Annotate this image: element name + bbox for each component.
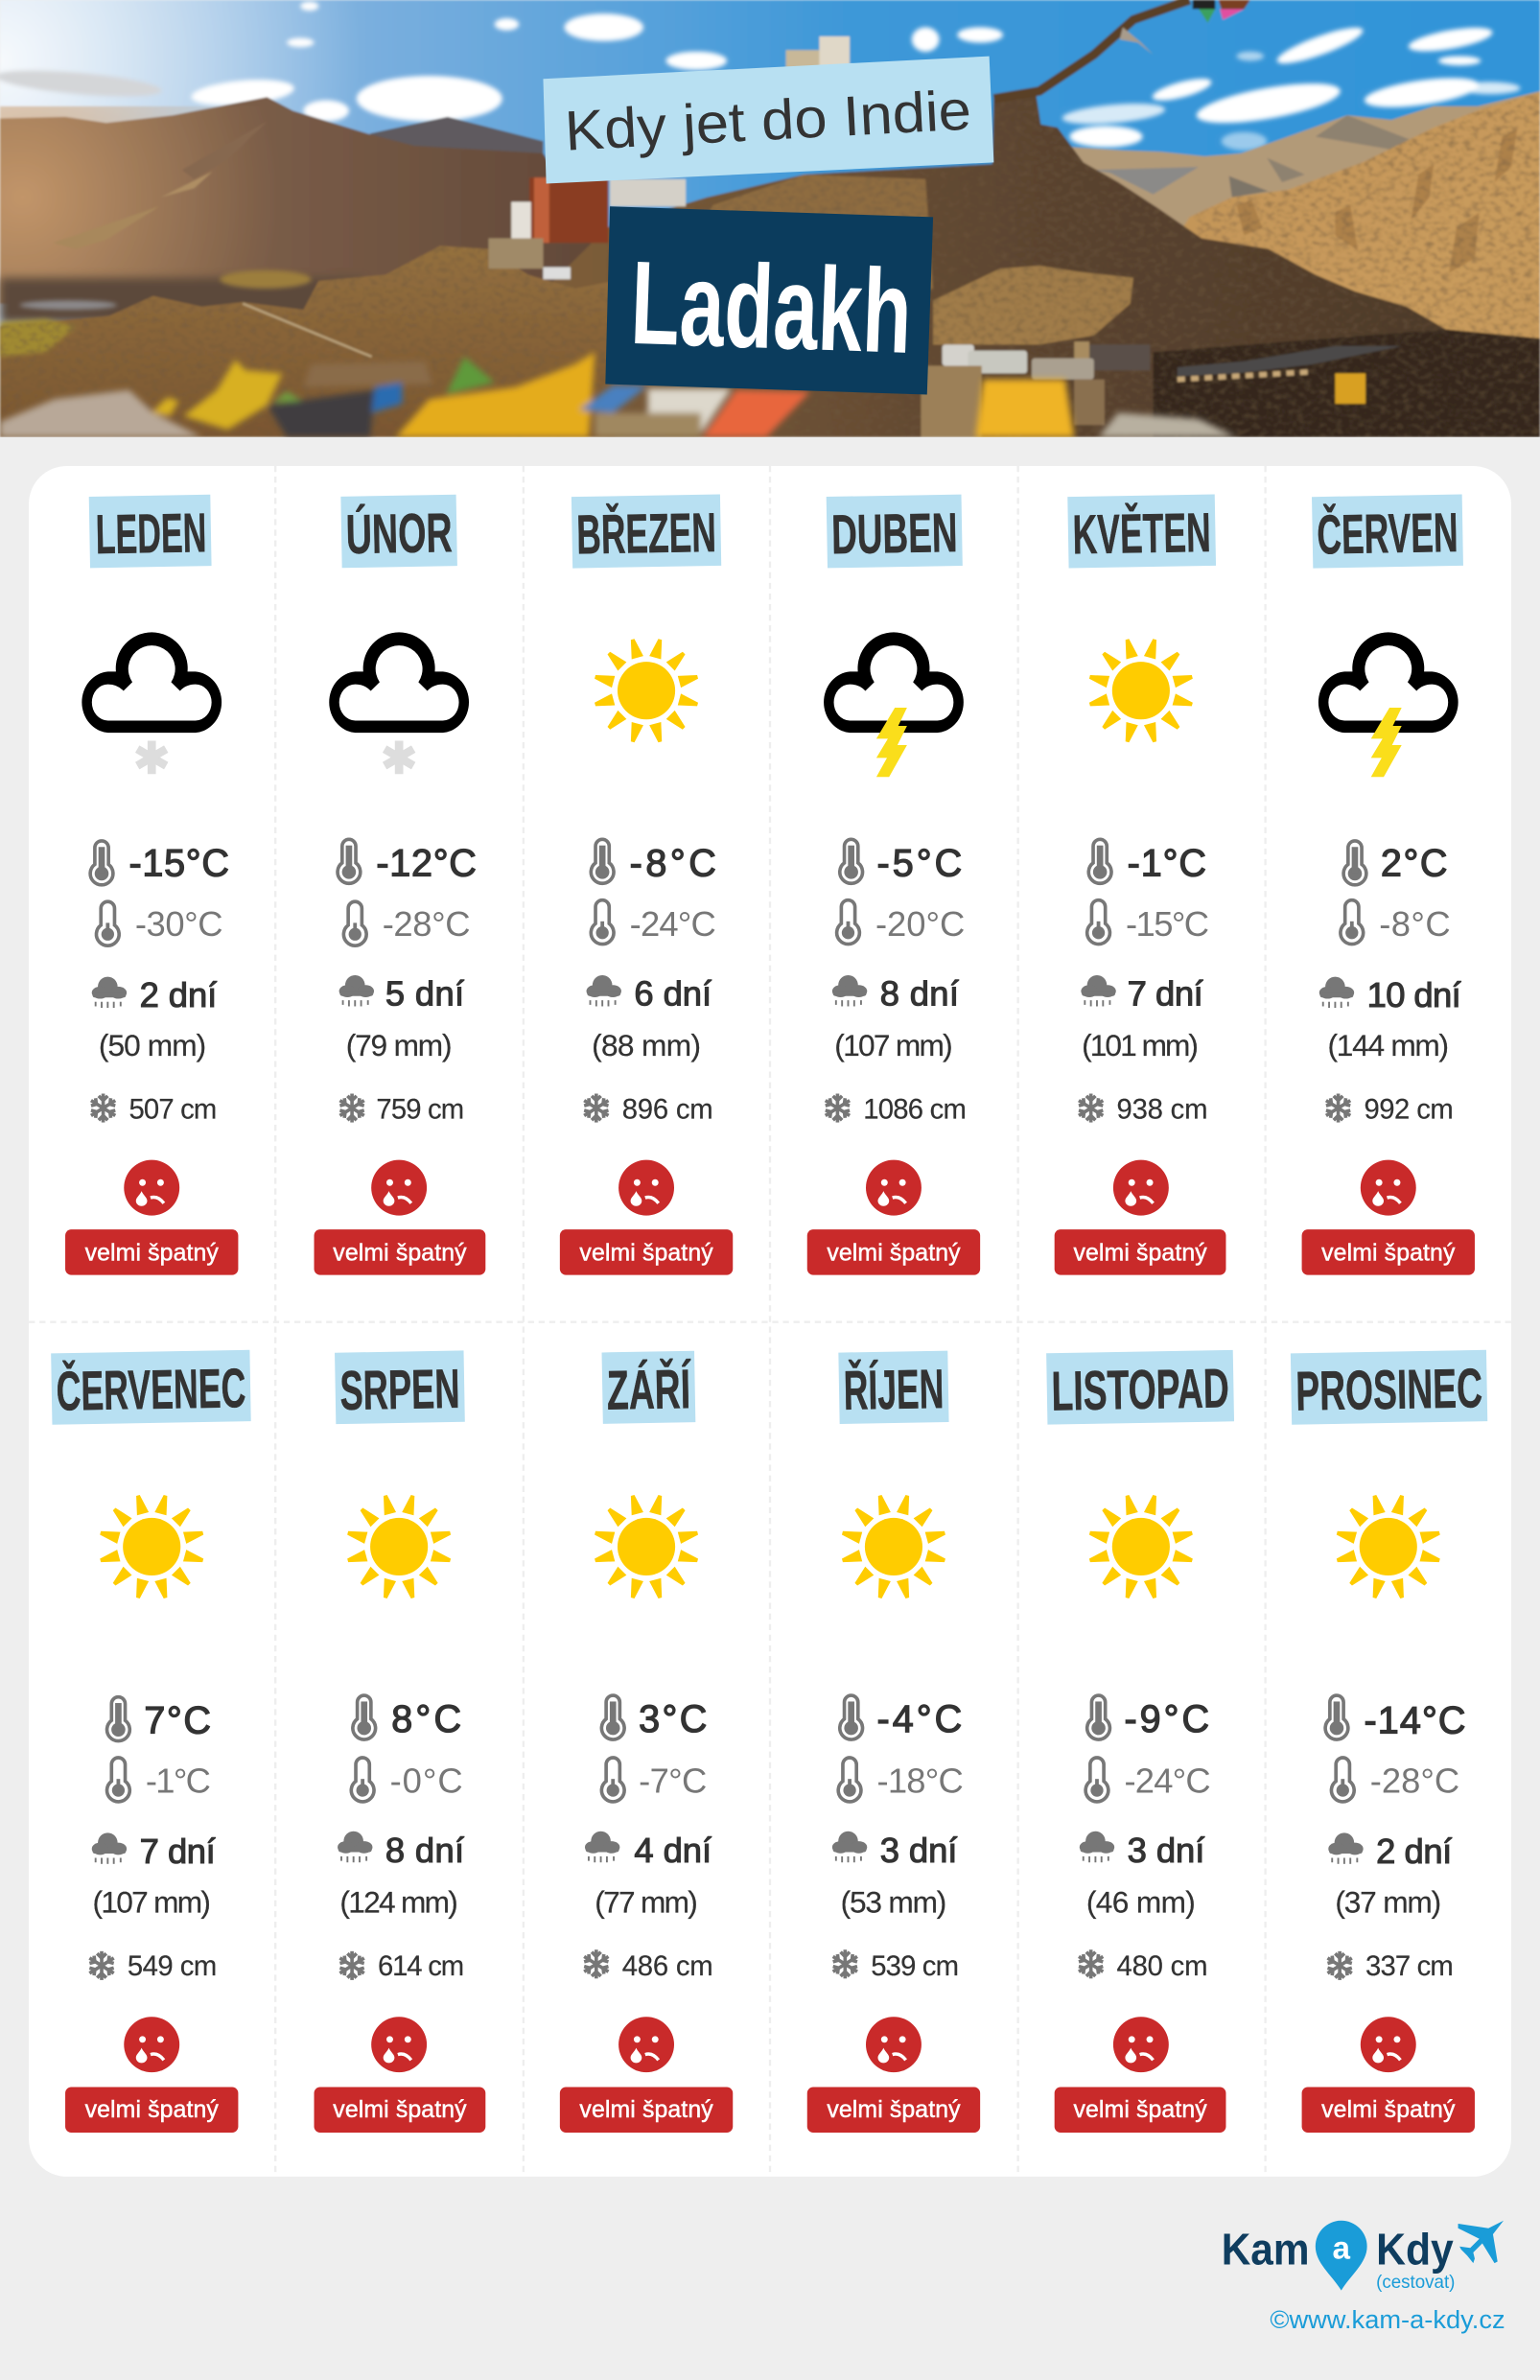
far tan ridge xyxy=(1070,90,1540,227)
icon: sun xyxy=(594,1494,699,1599)
low temperature xyxy=(343,901,471,945)
column: srpen xyxy=(315,1350,485,2133)
icon: map pin: a xyxy=(1332,2230,1350,2266)
icon: airplane xyxy=(1458,2221,1504,2263)
low temperature: -30°C xyxy=(135,904,223,944)
low temperature: -20°C xyxy=(875,904,965,944)
high temperature: -4°C xyxy=(877,1698,962,1740)
icon: sad face xyxy=(371,2017,427,2072)
rainy days: 3 dní xyxy=(880,1831,957,1870)
rainy days: 4 dní xyxy=(634,1831,712,1870)
column: cervenec xyxy=(51,1350,251,2133)
left mountain xyxy=(0,97,607,304)
icon: sun xyxy=(594,638,699,743)
rating badge: velmi špatný xyxy=(333,2097,467,2123)
high temperature: 7°C xyxy=(144,1700,211,1742)
high temperature: 8°C xyxy=(391,1698,461,1740)
snowfall xyxy=(1326,1093,1454,1126)
low temperature xyxy=(351,1758,463,1802)
low temperature: -0°C xyxy=(390,1761,463,1800)
snowfall: 539 cm xyxy=(871,1951,959,1982)
rating badge xyxy=(807,1229,980,1275)
high temperature xyxy=(591,839,716,884)
column: unor xyxy=(315,495,485,1275)
rainy days: 7 dní xyxy=(140,1832,216,1871)
icon: sad face xyxy=(1113,2017,1169,2072)
precipitation: (79 mm) xyxy=(346,1028,453,1062)
road and walls xyxy=(1178,346,1402,377)
month label xyxy=(340,495,457,568)
month label: ZÁŘÍ xyxy=(606,1358,692,1422)
rainy days xyxy=(1328,1832,1452,1871)
rating badge: velmi špatný xyxy=(579,1241,713,1267)
high temperature: -15°C xyxy=(128,842,229,884)
snowfall xyxy=(584,1093,713,1126)
month label xyxy=(335,1350,465,1424)
snowfall xyxy=(1079,1093,1207,1126)
hero photo: Ladakh mountains xyxy=(0,0,1540,437)
icon: cloud with lightning xyxy=(824,632,964,777)
subtitle banner: Kdy jet do Indie xyxy=(563,80,972,163)
snowfall: 759 cm xyxy=(376,1095,464,1126)
panel: months card xyxy=(29,466,1511,2177)
high temperature xyxy=(90,841,229,885)
rainy days: 5 dní xyxy=(385,974,464,1014)
high temperature xyxy=(840,839,962,884)
column: prosinec xyxy=(1291,1350,1487,2133)
month label xyxy=(602,1351,695,1424)
rating badge xyxy=(807,2087,980,2133)
precipitation: (124 mm) xyxy=(339,1884,458,1919)
month label xyxy=(51,1350,251,1425)
icon: cloud with snow xyxy=(82,632,222,774)
low temperature: -24°C xyxy=(630,904,716,944)
icon: sad face xyxy=(371,1160,427,1216)
snowfall xyxy=(1079,1949,1207,1982)
icon: cloud with lightning xyxy=(1318,632,1458,777)
high temperature xyxy=(1325,1695,1465,1742)
far gray ridge xyxy=(369,115,545,155)
low temperature: -15°C xyxy=(1126,904,1209,944)
golden right mountain xyxy=(1183,92,1540,339)
rating badge: velmi špatný xyxy=(827,1241,961,1267)
title banner: Ladakh xyxy=(629,237,914,379)
rating badge: velmi špatný xyxy=(333,1241,467,1267)
right foreground dark slope xyxy=(1154,329,1540,437)
snowfall xyxy=(91,1093,217,1126)
icon: sun xyxy=(99,1494,204,1599)
high temperature xyxy=(107,1697,211,1742)
rating badge: velmi špatný xyxy=(85,2097,219,2123)
low temperature xyxy=(601,1758,707,1802)
rock mottling xyxy=(0,91,1540,437)
central hill xyxy=(547,96,1540,437)
rating badge xyxy=(1055,2087,1225,2133)
high temperature xyxy=(1087,1695,1209,1740)
high temperature xyxy=(353,1695,461,1740)
rainy days xyxy=(338,1831,464,1870)
rainy days: 7 dní xyxy=(1128,974,1203,1014)
month label: SRPEN xyxy=(339,1359,460,1422)
logo: Kam a Kdy: Kam xyxy=(1222,2225,1309,2275)
suspension rope xyxy=(243,304,372,357)
icon: sun xyxy=(841,1494,946,1599)
low temperature xyxy=(107,1758,211,1802)
month label xyxy=(89,495,212,568)
column: cerven xyxy=(1302,494,1475,1275)
high temperature: -12°C xyxy=(376,842,477,884)
low temperature: -28°C xyxy=(383,904,471,944)
precipitation: (37 mm) xyxy=(1335,1884,1441,1919)
icon: sad face xyxy=(618,1160,674,1216)
low temperature: -8°C xyxy=(1379,904,1451,944)
month label: ÚNOR xyxy=(345,502,453,566)
snowfall: 507 cm xyxy=(128,1095,217,1126)
high temperature xyxy=(840,1695,962,1740)
column: brezen xyxy=(560,494,733,1275)
snowfall: 486 cm xyxy=(622,1951,713,1982)
title banner xyxy=(605,206,933,395)
rainy days: 2 dní xyxy=(140,975,217,1015)
icon: sad face xyxy=(124,1160,179,1216)
icon: sad face xyxy=(866,2017,922,2072)
website credit: ©www.kam-a-kdy.cz xyxy=(1270,2305,1505,2334)
column: kveten xyxy=(1055,494,1225,1275)
icon: map pin xyxy=(1316,2221,1367,2291)
icon: cloud with snow xyxy=(329,632,469,774)
icon: sad face xyxy=(1361,2017,1416,2072)
month label: BŘEZEN xyxy=(576,502,716,566)
precipitation: (101 mm) xyxy=(1082,1028,1199,1062)
rating badge: velmi špatný xyxy=(1321,2097,1456,2123)
snowfall: 1086 cm xyxy=(863,1095,967,1126)
low temperature xyxy=(591,900,716,945)
rating badge: velmi špatný xyxy=(1073,2097,1207,2123)
rainy days: 8 dní xyxy=(385,1831,464,1870)
rainy days xyxy=(587,974,712,1014)
high temperature xyxy=(338,839,477,884)
snowfall: 480 cm xyxy=(1117,1951,1207,1982)
high temperature: 3°C xyxy=(639,1698,707,1740)
low temperature: -18°C xyxy=(877,1761,964,1800)
precipitation: (53 mm) xyxy=(841,1884,946,1919)
logo: Kam a Kdy: (cestovat) xyxy=(1376,2272,1455,2293)
rainy days xyxy=(1319,975,1461,1015)
rainy days: 6 dní xyxy=(634,974,712,1014)
valley band xyxy=(0,278,364,323)
month label: DUBEN xyxy=(831,502,958,566)
month label xyxy=(1067,494,1216,569)
rainy days xyxy=(1081,974,1203,1014)
low temperature: -1°C xyxy=(146,1761,211,1800)
snowfall xyxy=(89,1951,217,1982)
precipitation: (46 mm) xyxy=(1086,1884,1196,1919)
rainy days xyxy=(832,1831,957,1870)
snowfall xyxy=(584,1949,713,1982)
snowfall: 337 cm xyxy=(1365,1951,1454,1982)
column: listopad xyxy=(1046,1350,1234,2133)
rating badge xyxy=(1302,2087,1475,2133)
rating badge xyxy=(1055,1229,1225,1275)
icon: sad face xyxy=(618,2017,674,2072)
rainy days xyxy=(1080,1831,1204,1870)
high temperature: 2°C xyxy=(1381,842,1447,884)
logo: Kam a Kdy xyxy=(1222,2221,1504,2293)
rating badge: velmi špatný xyxy=(85,1241,219,1267)
month label xyxy=(572,494,721,569)
rating badge xyxy=(315,1229,485,1275)
low temperature xyxy=(96,901,223,945)
precipitation: (107 mm) xyxy=(93,1884,211,1919)
snowfall: 938 cm xyxy=(1117,1095,1207,1126)
rating badge xyxy=(65,1229,238,1275)
high temperature xyxy=(601,1695,707,1740)
month label: ŘÍJEN xyxy=(843,1358,945,1422)
month label xyxy=(838,1351,949,1424)
column: leden xyxy=(65,495,238,1275)
rainy days: 10 dní xyxy=(1367,975,1461,1015)
rating badge xyxy=(560,2087,733,2133)
precipitation: (107 mm) xyxy=(834,1028,953,1062)
logo: Kam a Kdy: Kdy xyxy=(1376,2225,1454,2275)
column: zari xyxy=(560,1351,733,2133)
rainy days xyxy=(92,975,217,1015)
rainy days: 8 dní xyxy=(880,974,959,1014)
column: duben xyxy=(807,495,980,1275)
rating badge xyxy=(560,1229,733,1275)
snowfall: 992 cm xyxy=(1364,1095,1454,1126)
month label xyxy=(1046,1350,1234,1425)
high temperature: -5°C xyxy=(877,842,962,884)
rating badge: velmi špatný xyxy=(827,2097,961,2123)
snowfall xyxy=(833,1949,959,1982)
icon: sun xyxy=(1336,1494,1441,1599)
rating badge xyxy=(315,2087,485,2133)
snowfall xyxy=(339,1951,464,1982)
low temperature: -7°C xyxy=(639,1761,707,1800)
column: rijen xyxy=(807,1351,980,2133)
rating badge: velmi špatný xyxy=(1073,1241,1207,1267)
icon: sad face xyxy=(124,2017,179,2072)
month label: ČERVENEC xyxy=(56,1357,246,1423)
month label xyxy=(1312,494,1463,569)
snowfall xyxy=(1327,1951,1454,1982)
precipitation: (144 mm) xyxy=(1327,1028,1449,1062)
rainy days xyxy=(832,974,959,1014)
rating badge: velmi špatný xyxy=(579,2097,713,2123)
precipitation: (77 mm) xyxy=(595,1884,698,1919)
snowfall: 549 cm xyxy=(128,1951,217,1982)
rating badge: velmi špatný xyxy=(1321,1241,1456,1267)
low temperature xyxy=(837,900,965,945)
low temperature: -28°C xyxy=(1370,1761,1459,1800)
low temperature xyxy=(838,1758,964,1802)
icon: sun xyxy=(1088,638,1194,743)
precipitation: (50 mm) xyxy=(99,1028,206,1062)
subtitle banner xyxy=(543,57,993,184)
high temperature: -8°C xyxy=(630,842,716,884)
rainy days: 2 dní xyxy=(1376,1832,1452,1871)
month label: LISTOPAD xyxy=(1051,1358,1229,1423)
rainy days xyxy=(339,974,464,1014)
left foreground rocks xyxy=(0,245,615,437)
rainy days xyxy=(585,1831,712,1870)
rainy days: 3 dní xyxy=(1128,1831,1204,1870)
precipitation: (88 mm) xyxy=(592,1028,701,1062)
high temperature: -1°C xyxy=(1128,842,1206,884)
icon: sad face xyxy=(1113,1160,1169,1216)
blurred flags xyxy=(0,352,1237,437)
snowfall: 896 cm xyxy=(622,1095,713,1126)
icon: sad face xyxy=(1361,1160,1416,1216)
prayer flags string xyxy=(993,0,1189,99)
high temperature: -14°C xyxy=(1364,1700,1465,1742)
icon: sun xyxy=(346,1494,452,1599)
rating badge xyxy=(1302,1229,1475,1275)
low temperature xyxy=(1085,1758,1211,1802)
month label: KVĚTEN xyxy=(1072,502,1211,566)
rating badge xyxy=(65,2087,238,2133)
icon: sad face xyxy=(866,1160,922,1216)
low temperature: -24°C xyxy=(1124,1761,1211,1800)
high temperature xyxy=(1343,841,1447,885)
snowfall: 614 cm xyxy=(378,1951,464,1982)
low temperature xyxy=(1087,900,1209,945)
high temperature xyxy=(1088,839,1206,884)
low temperature xyxy=(1341,900,1451,945)
month label: LEDEN xyxy=(95,502,207,566)
snowfall xyxy=(339,1093,464,1126)
month label xyxy=(827,495,963,568)
rainy days xyxy=(92,1832,216,1871)
low temperature xyxy=(1331,1758,1459,1802)
monastery xyxy=(784,48,821,67)
icon: sun xyxy=(1088,1494,1194,1599)
high temperature: -9°C xyxy=(1124,1698,1209,1740)
